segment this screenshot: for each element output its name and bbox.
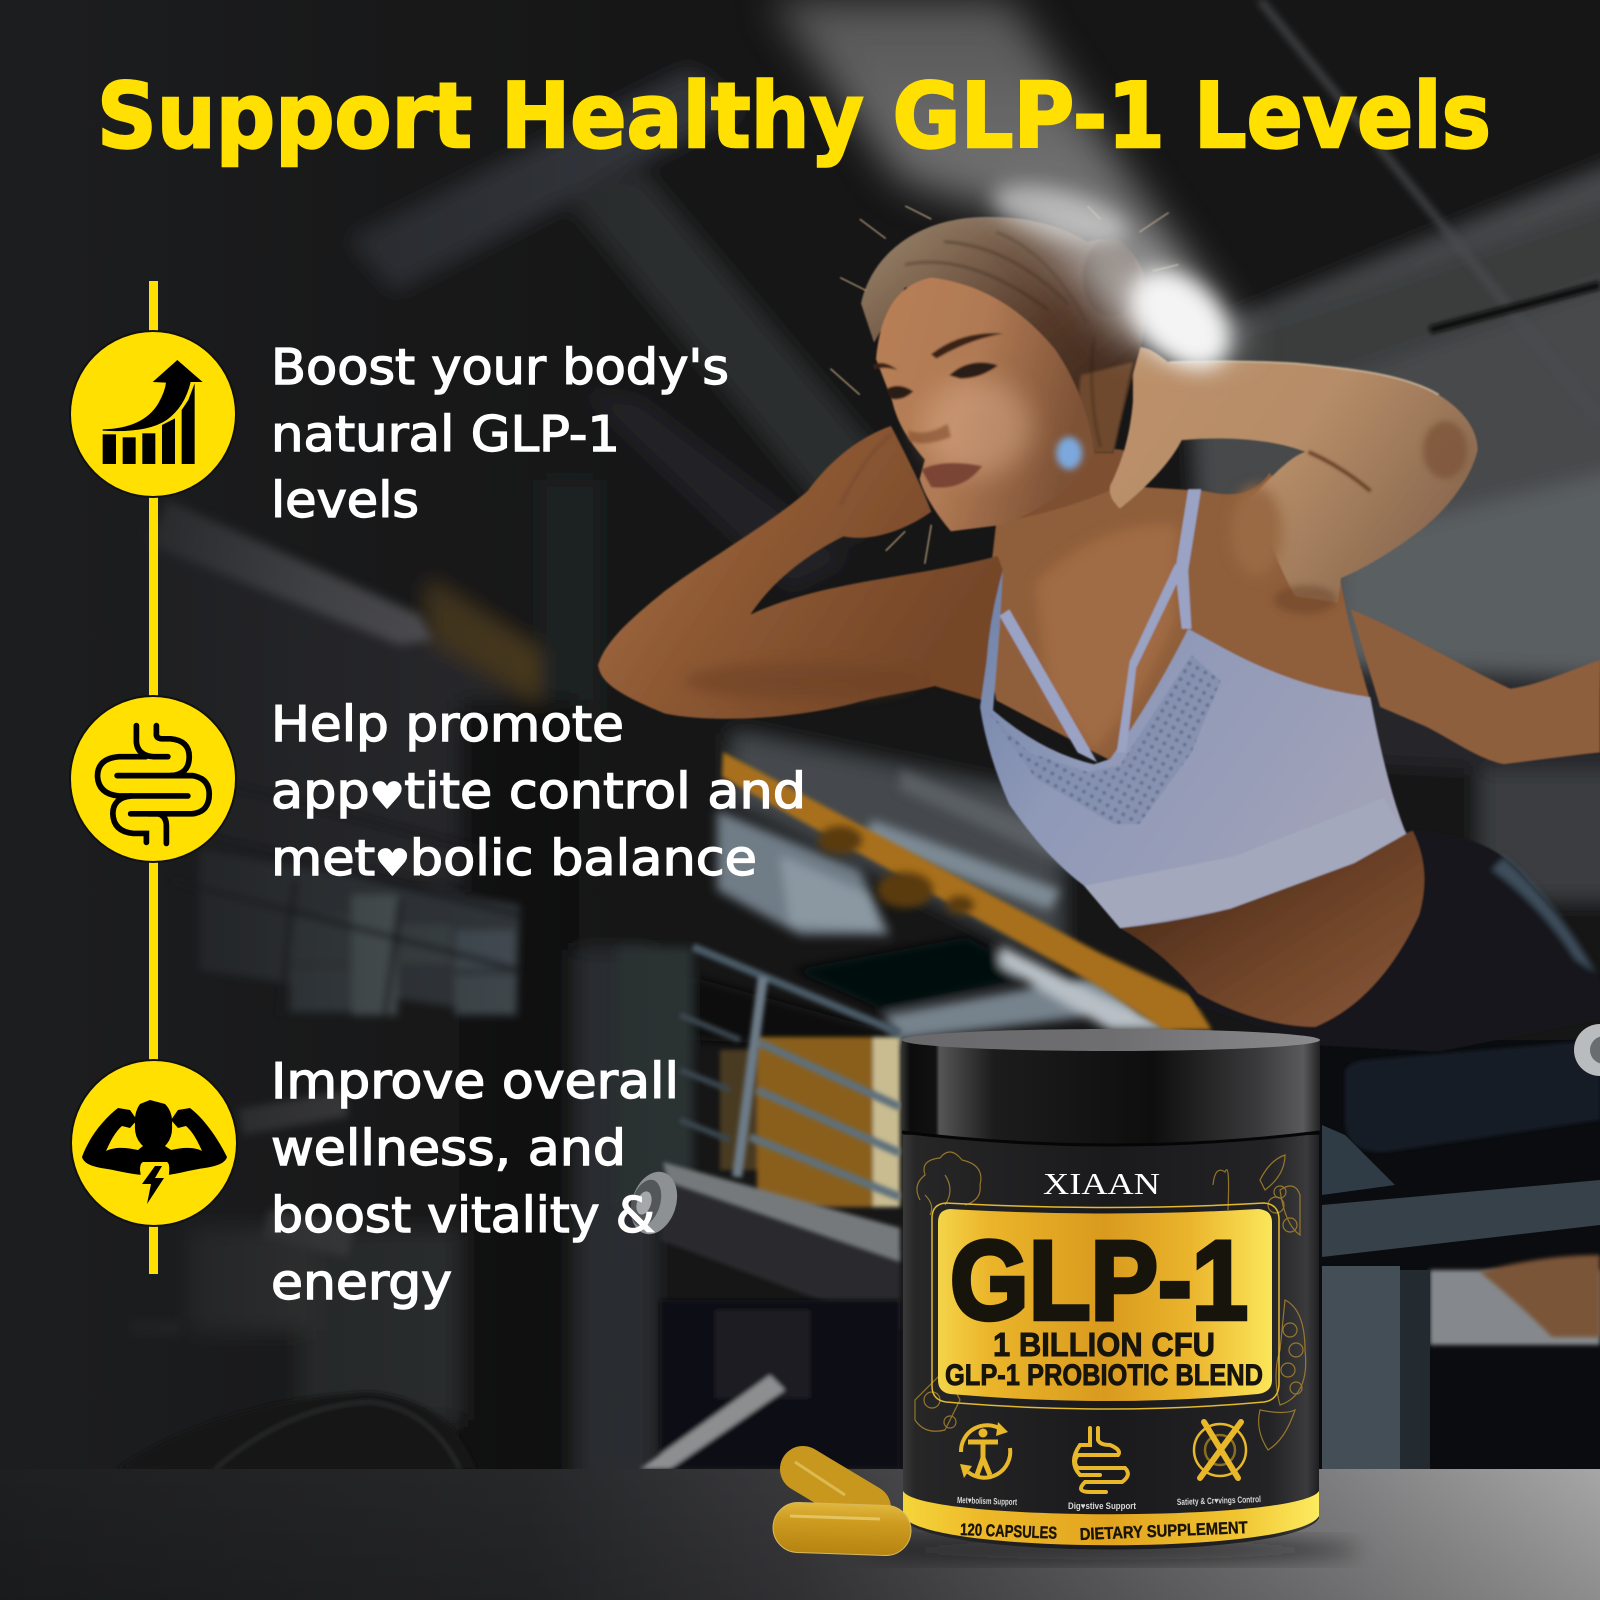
background: railing (680, 947, 900, 1197)
jar body (903, 1135, 1319, 1550)
woman: shadow on chest (1035, 524, 1178, 752)
woman: hand shading (840, 434, 892, 505)
woman: bra mesh panels (990, 655, 1221, 824)
woman: front arm (598, 426, 1003, 719)
background: right ceiling black rail (1430, 285, 1600, 330)
background: dark wheel (117, 1392, 476, 1469)
woman: hair wisps (830, 206, 1178, 564)
woman: shorts (1169, 830, 1550, 1052)
woman: arm rim light (1169, 361, 1439, 395)
woman: rear arm (1351, 609, 1600, 764)
woman: cheek highlight (922, 378, 1032, 476)
jar lid (902, 1041, 1320, 1145)
label heading GLP-1: GLP-1 (950, 1218, 1248, 1343)
background: barbell bar and plate (630, 1160, 903, 1302)
jar shadow (860, 1540, 1360, 1560)
background: concrete under beam (617, 770, 1180, 1207)
woman (598, 206, 1600, 1052)
woman: hair strands (905, 232, 1100, 447)
background: bench under jar, right side (1300, 1024, 1600, 1469)
small caption: metabolism: Met♥bolism Support (957, 1495, 1017, 1507)
jar icon: satiety (1194, 1422, 1246, 1478)
text block: benefit 3 (271, 1053, 679, 1311)
background: diagonal ceiling line (1256, 0, 1508, 304)
jar icon: metabolism (960, 1422, 1010, 1478)
woman: hair (861, 217, 1147, 453)
woman: arm crease (1309, 452, 1370, 491)
woman: eyes (886, 363, 998, 399)
woman: raised arm (1110, 347, 1478, 603)
jar lid top (902, 1029, 1320, 1051)
woman: face (876, 278, 1094, 531)
jar icon: digestive (1074, 1428, 1128, 1492)
botanical line art (915, 1152, 1306, 1450)
gold label (938, 1209, 1272, 1401)
woman: blue flare (1056, 437, 1082, 469)
table surface (0, 1469, 1600, 1600)
timeline line (149, 281, 158, 1274)
small caption: digestive: Dig♥stive Support (1068, 1501, 1136, 1511)
woman: eyebrows (873, 333, 1003, 370)
background: left fade overlay (64, 0, 532, 1469)
woman: torso (983, 473, 1370, 765)
woman: hair tail (1079, 362, 1133, 453)
text block: benefit 1: natural GLP-1 (271, 406, 620, 463)
band text: capsules: 120 CAPSULES (960, 1520, 1058, 1543)
text block: benefit 1: levels (271, 472, 419, 529)
label subheading: 1 BILLION CFU (993, 1326, 1215, 1363)
background: machine and floor bar (640, 1300, 900, 1469)
gold label outer line (932, 1203, 1279, 1409)
background: floor-level panels (240, 1090, 353, 1254)
woman: bra (980, 570, 1406, 928)
light glare by the head (770, 0, 1248, 388)
background: orange steel beam (722, 752, 1212, 1030)
text block: benefit 2: met♥bolic balance (271, 830, 757, 887)
woman: bra straps (1000, 489, 1201, 762)
capsules (772, 1462, 912, 1556)
band text: dietary supplement: DIETARY SUPPLEMENT (1079, 1518, 1249, 1544)
label blend name: GLP-1 PROBIOTIC BLEND (945, 1359, 1263, 1392)
text block: benefit 1 (271, 339, 729, 529)
text block: benefit 3: Improve overall (271, 1053, 679, 1110)
product jar (902, 1029, 1320, 1550)
text block: benefit 2: Help promote (271, 696, 624, 753)
text block: benefit 2: app♥tite control and (271, 763, 806, 820)
capsule: back (803, 1469, 868, 1508)
capsule: front highlight (790, 1516, 880, 1519)
title: Support Healthy GLP-1 Levels (97, 64, 1491, 169)
woman: lips (922, 463, 982, 488)
background: beam dark blotches (818, 826, 974, 914)
woman: shorts highlight (1491, 857, 1596, 974)
text block: benefit 2 (271, 696, 806, 887)
woman: shoulder blend (1230, 486, 1283, 577)
woman: elbow shadow (1423, 421, 1467, 479)
capsule: front (772, 1502, 912, 1556)
background: window panes (202, 854, 523, 1019)
icon: intestines (70, 696, 236, 862)
brand name: XIAAN (1043, 1166, 1160, 1201)
jar lid edge (902, 1132, 1320, 1145)
jar bottom band (903, 1491, 1319, 1545)
icon: strong man with lightning (71, 1060, 237, 1226)
small caption: satiety: Satiety & Cr♥vings Control (1177, 1494, 1261, 1507)
capsule: back highlight (795, 1462, 845, 1495)
text block: benefit 3: energy (271, 1254, 452, 1311)
text block: benefit 3: boost vitality & (271, 1187, 655, 1244)
woman: shadow under upper arm (1274, 585, 1337, 614)
woman: bra lower band (1084, 798, 1406, 928)
icon: rising bar chart with arrow (70, 331, 236, 497)
woman: neck (996, 447, 1136, 551)
background: light fixture streak (150, 500, 432, 645)
background: orange wall behind railing (720, 1037, 900, 1207)
woman: hair bun (1083, 239, 1137, 317)
text block: benefit 3: wellness, and (271, 1120, 626, 1177)
text block: benefit 1: Boost your body's (271, 339, 729, 396)
woman: upper arm shade (684, 663, 918, 699)
woman: midriff (1120, 831, 1424, 1027)
table shading (0, 1469, 1600, 1600)
woman: nose shadow (909, 424, 951, 443)
